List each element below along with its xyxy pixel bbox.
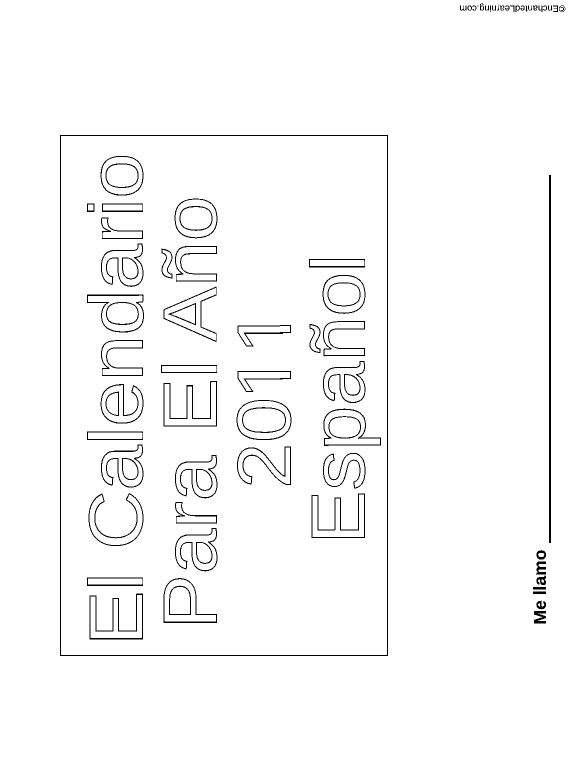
- name label: Me llamo: Me llamo: [530, 550, 550, 624]
- cover frame: [60, 136, 388, 656]
- title line: El Calendario: El Calendario: [73, 153, 159, 646]
- name write-in line: [549, 175, 551, 543]
- title line: Español: Español: [295, 254, 381, 544]
- title line: 2011: 2011: [221, 308, 307, 488]
- copyright notice (upside down): ©EnchantedLearning.com: [460, 4, 566, 14]
- title line: Para El Año: Para El Año: [147, 196, 233, 629]
